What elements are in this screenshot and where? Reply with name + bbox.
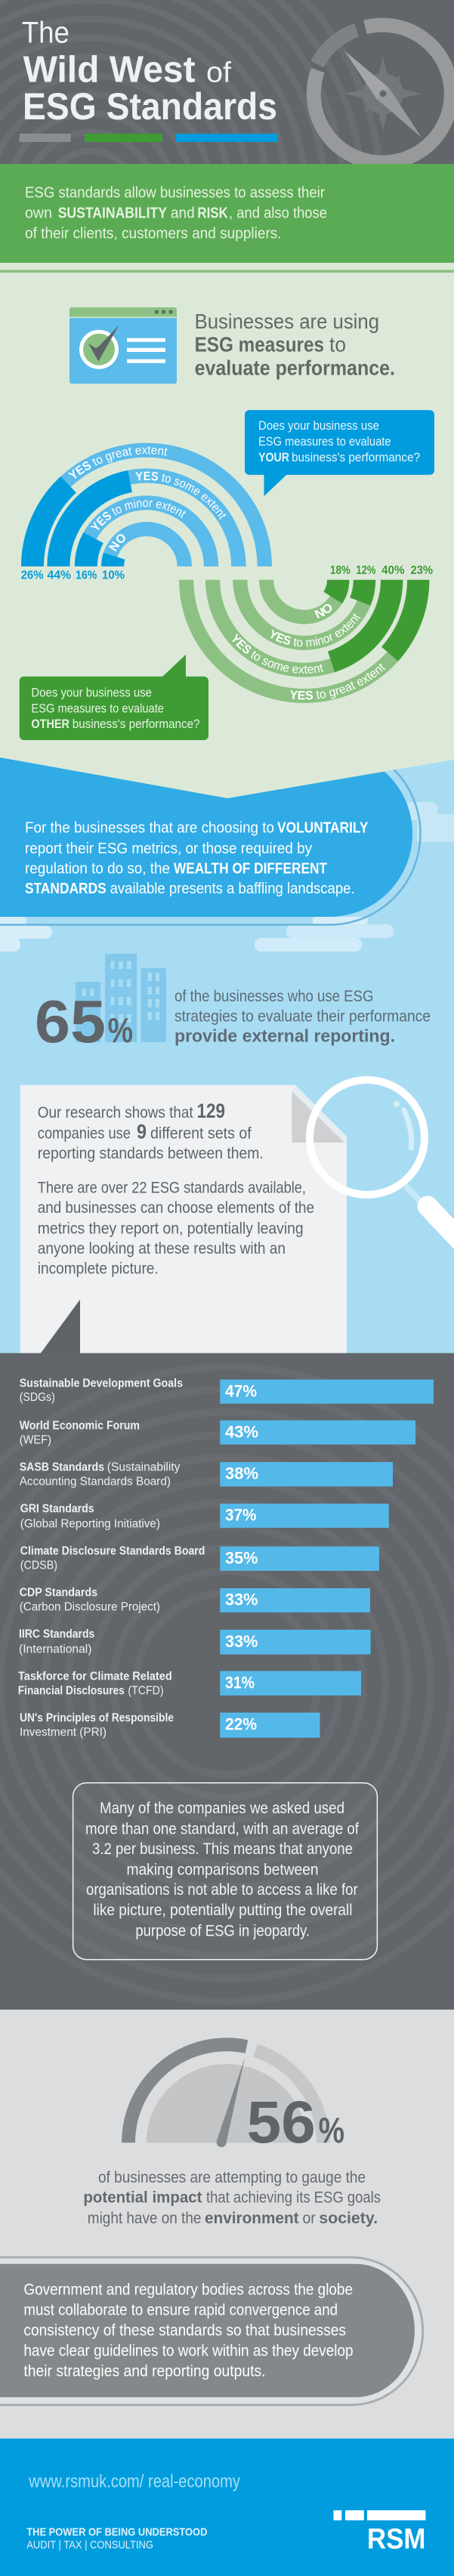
callout: many companies text box bbox=[73, 1783, 377, 1960]
text: potential impact: that achieving its ESG goals bbox=[206, 2189, 381, 2207]
title: of bbox=[206, 57, 231, 88]
stat: 56%: 56 bbox=[247, 2088, 316, 2155]
chart: gauge bbox=[128, 2044, 323, 2147]
percent labels: blue chart: 10% bbox=[102, 569, 125, 582]
callout: your performance question: Does your business use bbox=[258, 418, 379, 433]
callout: your performance question: YOUR bbox=[258, 450, 289, 464]
footer url: www.rsmuk.com/ real-economy bbox=[28, 2471, 240, 2491]
stat: 65% bbox=[35, 988, 133, 1055]
bar labels bbox=[18, 1377, 205, 1738]
text: potential impact: of businesses are attempting to gauge the bbox=[98, 2169, 366, 2186]
heading: businesses are using ESG measures: to bbox=[329, 333, 346, 356]
callout: many companies text box: purpose of ESG in jeopardy. bbox=[135, 1922, 310, 1939]
callout: other business question: ESG measures to evaluate bbox=[31, 701, 164, 715]
callout: many companies text box: more than one standard, with an average of bbox=[85, 1820, 359, 1837]
panel: standards section bbox=[0, 1300, 454, 2010]
chart: blue semicircle own performance: YES to minor extent bbox=[91, 498, 186, 530]
panel: voluntary reporting text banner: WEALTH OF DIFFERENT bbox=[174, 860, 327, 878]
icon: browser window with checkmark bbox=[69, 307, 177, 384]
panel: footer bbox=[0, 2439, 454, 2576]
text: research findings: There are over 22 ESG standards available, bbox=[38, 1179, 306, 1196]
chart: green semicircle other performance bbox=[179, 564, 433, 703]
panel: sky section bbox=[0, 743, 454, 1359]
bar values: 35% bbox=[225, 1548, 258, 1567]
bar labels: CDP Standards bbox=[20, 1587, 97, 1600]
bar values: 22% bbox=[225, 1714, 257, 1733]
bar labels: (WEF) bbox=[20, 1434, 51, 1447]
bar values: 38% bbox=[225, 1464, 258, 1483]
stat: 65%: % bbox=[108, 1010, 133, 1050]
text: external reporting: provide external reporting. bbox=[174, 1026, 395, 1045]
clouds bbox=[0, 802, 454, 952]
bar labels: Financial Disclosures bbox=[18, 1685, 125, 1698]
callout: your performance question bbox=[245, 410, 434, 496]
heading: businesses are using ESG measures bbox=[195, 310, 395, 380]
panel: green intro band: and bbox=[171, 205, 195, 221]
title: The bbox=[22, 17, 69, 50]
icon: page fold bbox=[292, 1091, 344, 1143]
bar labels: SASB Standards bbox=[20, 1461, 104, 1474]
text: potential impact: might have on the bbox=[88, 2210, 201, 2227]
bar labels: (Sustainability bbox=[107, 1461, 181, 1474]
bar labels: World Economic Forum bbox=[20, 1420, 140, 1433]
panel: voluntary reporting text banner bbox=[0, 751, 412, 917]
panel: voluntary reporting text banner: For the businesses that are choosing to bbox=[25, 819, 274, 837]
logo: RSM bbox=[334, 2510, 425, 2556]
icon: city buildings bbox=[76, 954, 166, 1042]
bar values: 31% bbox=[225, 1673, 255, 1692]
bar values: 37% bbox=[225, 1506, 257, 1525]
percent labels: green chart: 12% bbox=[356, 564, 376, 577]
percent labels: blue chart: 26% bbox=[21, 569, 44, 582]
callout: many companies text box: organisations is not able to access a like for bbox=[86, 1881, 358, 1899]
bar values bbox=[225, 1381, 258, 1733]
percent labels: blue chart bbox=[21, 569, 125, 582]
panel: green intro band: ESG standards allow businesses to assess their bbox=[25, 185, 325, 202]
bar values: 43% bbox=[225, 1422, 258, 1441]
panel: voluntary reporting text banner: available presents a baffling landscape. bbox=[110, 880, 355, 897]
percent labels: green chart: 18% bbox=[330, 564, 351, 577]
panel: green intro band: own bbox=[25, 205, 52, 221]
strapline bbox=[26, 2525, 208, 2552]
panel: voluntary reporting text banner: report their ESG metrics, or those required by bbox=[25, 840, 313, 857]
callout: government and regulatory bodies: their strategies and reporting outputs. bbox=[23, 2363, 266, 2380]
strapline: THE POWER OF BEING UNDERSTOOD bbox=[26, 2525, 208, 2538]
chart: green semicircle other performance: NO bbox=[314, 604, 332, 619]
bar labels: (Global Reporting Initiative) bbox=[20, 1518, 160, 1531]
bar values: 33% bbox=[225, 1590, 258, 1609]
text: potential impact: society. bbox=[319, 2210, 378, 2227]
stat: 56%: % bbox=[319, 2110, 344, 2150]
text: research findings: and businesses can choose elements of the bbox=[38, 1199, 314, 1217]
heading: businesses are using ESG measures: evaluate performance. bbox=[195, 356, 395, 380]
chart: blue semicircle own performance: YES to great extent bbox=[68, 446, 168, 479]
text: research findings: 9 bbox=[137, 1120, 147, 1143]
title: Wild West bbox=[23, 49, 196, 90]
bar labels: Accounting Standards Board) bbox=[20, 1476, 171, 1489]
panel: green intro band: , and also those bbox=[229, 205, 327, 221]
chart: blue semicircle own performance: YES to some extent bbox=[135, 471, 227, 520]
text: potential impact bbox=[83, 2169, 381, 2227]
panel: measures section bbox=[0, 263, 454, 798]
panel: voluntary reporting text banner: STANDARDS bbox=[25, 880, 107, 897]
bar labels: IIRC Standards bbox=[19, 1628, 94, 1641]
panel: green intro band: of their clients, customers and suppliers. bbox=[25, 226, 282, 242]
percent labels: blue chart: 16% bbox=[76, 569, 97, 582]
gauge needle bbox=[217, 2058, 245, 2147]
bar labels: (TCFD) bbox=[128, 1685, 164, 1698]
icon: compass bbox=[313, 25, 451, 162]
text: potential impact: environment bbox=[205, 2210, 299, 2227]
logo: RSM: RSM bbox=[367, 2524, 425, 2556]
text: research findings: incomplete picture. bbox=[38, 1260, 159, 1278]
bar values: 33% bbox=[225, 1632, 258, 1651]
icon: magnifying glass bbox=[310, 1080, 454, 1254]
panel: voluntary reporting text banner: VOLUNTARILY bbox=[277, 819, 369, 837]
chart: green semicircle other performance: YES to minor extent bbox=[270, 613, 361, 646]
callout: your performance question: business's performance? bbox=[292, 450, 420, 464]
callout: other business question bbox=[20, 655, 208, 740]
text: external reporting bbox=[174, 988, 431, 1045]
callout: other business question: business's performance? bbox=[73, 717, 199, 731]
chart: green semicircle other performance: YES to some extent bbox=[232, 633, 323, 674]
panel: voluntary reporting text banner: regulation to do so, the bbox=[25, 860, 170, 878]
percent labels: green chart bbox=[330, 564, 433, 577]
bar labels: GRI Standards bbox=[20, 1503, 94, 1516]
callout: many companies text box: 3.2 per business. This means that anyone bbox=[92, 1840, 353, 1858]
panel: green intro band: SUSTAINABILITY bbox=[58, 205, 168, 221]
text: research findings: anyone looking at these results with an bbox=[38, 1240, 286, 1257]
panel: paper document bbox=[20, 1085, 347, 1359]
speech tail bbox=[41, 1300, 80, 1353]
heading: businesses are using ESG measures: Businesses are using bbox=[195, 310, 379, 333]
text: external reporting: of the businesses who use ESG bbox=[174, 988, 373, 1005]
text: external reporting: strategies to evaluate their performance bbox=[174, 1008, 431, 1026]
title underline bars bbox=[20, 134, 278, 142]
title bbox=[22, 17, 277, 128]
callout: government and regulatory bodies: must collaborate to ensure rapid convergence and bbox=[23, 2302, 338, 2319]
strapline: AUDIT | TAX | CONSULTING bbox=[26, 2539, 153, 2552]
bar labels: Investment (PRI) bbox=[20, 1726, 107, 1738]
title: ESG Standards bbox=[23, 85, 277, 128]
percent labels: blue chart: 44% bbox=[47, 569, 71, 582]
text: research findings: metrics they report on, potentially leaving bbox=[38, 1220, 304, 1237]
callout: government and regulatory bodies: have clear guidelines to work within as they develop bbox=[23, 2342, 354, 2359]
callout: government and regulatory bodies: Government and regulatory bodies across the globe bbox=[23, 2281, 353, 2298]
chart: blue semicircle own performance: NO bbox=[109, 534, 125, 551]
text: research findings: 129 bbox=[197, 1100, 225, 1122]
text: potential impact: potential impact bbox=[83, 2189, 202, 2207]
stat: 56% bbox=[247, 2088, 344, 2155]
callout: your performance question: ESG measures to evaluate bbox=[258, 434, 391, 449]
bar labels: Taskforce for Climate Related bbox=[18, 1671, 172, 1683]
text: potential impact: or bbox=[302, 2210, 316, 2227]
text: research findings: reporting standards between them. bbox=[38, 1145, 264, 1162]
bar labels: (Carbon Disclosure Project) bbox=[20, 1601, 160, 1614]
callout: government and regulatory bodies bbox=[0, 2257, 423, 2405]
bars bbox=[220, 1380, 434, 1738]
stat: 65%: 65 bbox=[35, 988, 106, 1055]
panel: impact section bbox=[0, 2010, 454, 2439]
chart: blue semicircle own performance bbox=[21, 443, 272, 582]
heading: businesses are using ESG measures: ESG measures bbox=[195, 333, 324, 356]
chart: green semicircle other performance: YES to great extent bbox=[290, 663, 386, 699]
callout: many companies text box: like picture, potentially putting the overall bbox=[93, 1902, 353, 1919]
percent labels: green chart: 23% bbox=[411, 564, 433, 577]
bar labels: (SDGs) bbox=[20, 1391, 55, 1404]
text: research findings: Our research shows that bbox=[38, 1104, 193, 1121]
panel: green intro band bbox=[0, 164, 454, 263]
bar labels: UN's Principles of Responsible bbox=[20, 1712, 174, 1725]
bar labels: (CDSB) bbox=[20, 1559, 57, 1572]
text: research findings: companies use bbox=[38, 1124, 131, 1142]
bar values: 47% bbox=[225, 1381, 257, 1400]
callout: many companies text box: making comparisons between bbox=[127, 1861, 319, 1878]
callout: many companies text box: Many of the companies we asked used bbox=[100, 1800, 344, 1817]
bar labels: Climate Disclosure Standards Board bbox=[20, 1545, 205, 1558]
text: research findings: different sets of bbox=[150, 1124, 252, 1142]
bar labels: Sustainable Development Goals bbox=[20, 1377, 183, 1390]
chart: standards bar chart bbox=[18, 1377, 434, 1738]
text: research findings bbox=[38, 1100, 314, 1278]
bar labels: (International) bbox=[19, 1643, 92, 1656]
panel: header bbox=[0, 0, 454, 164]
callout: other business question: OTHER bbox=[31, 717, 69, 731]
callout: government and regulatory bodies: consistency of these standards so that businesses bbox=[23, 2322, 346, 2340]
percent labels: green chart: 40% bbox=[381, 564, 405, 577]
callout: other business question: Does your business use bbox=[31, 685, 152, 699]
panel: green intro band: RISK bbox=[197, 205, 228, 221]
